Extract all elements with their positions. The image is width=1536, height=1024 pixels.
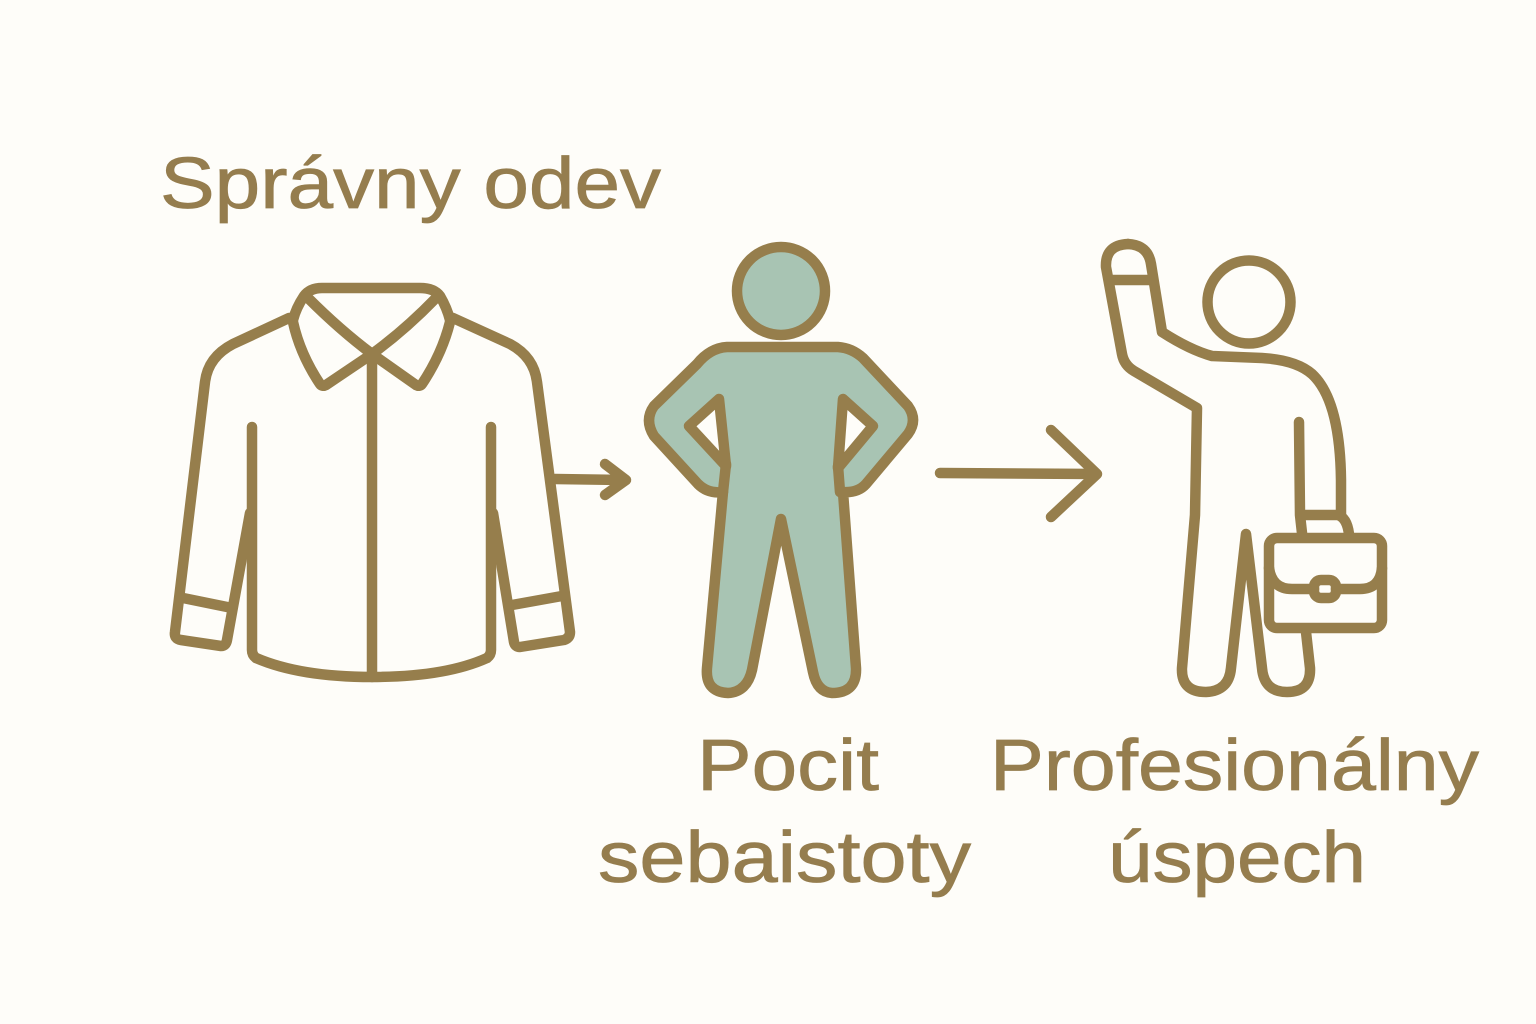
icon: shirt	[175, 288, 570, 677]
label: confidence: sebaistoty	[598, 818, 971, 898]
arrow: shirt to confidence	[555, 464, 626, 495]
label: professional success: úspech	[1108, 818, 1366, 898]
label: professional success: Profesionálny	[990, 726, 1479, 806]
heading: proper clothing: Správny odev	[160, 144, 661, 224]
label: confidence	[598, 726, 971, 898]
icon: successful figure with briefcase	[1106, 244, 1382, 692]
arrow: confidence to success	[940, 430, 1097, 517]
icon: confident figure	[649, 247, 913, 693]
label: professional success	[990, 726, 1479, 898]
label: confidence: Pocit	[697, 726, 879, 806]
